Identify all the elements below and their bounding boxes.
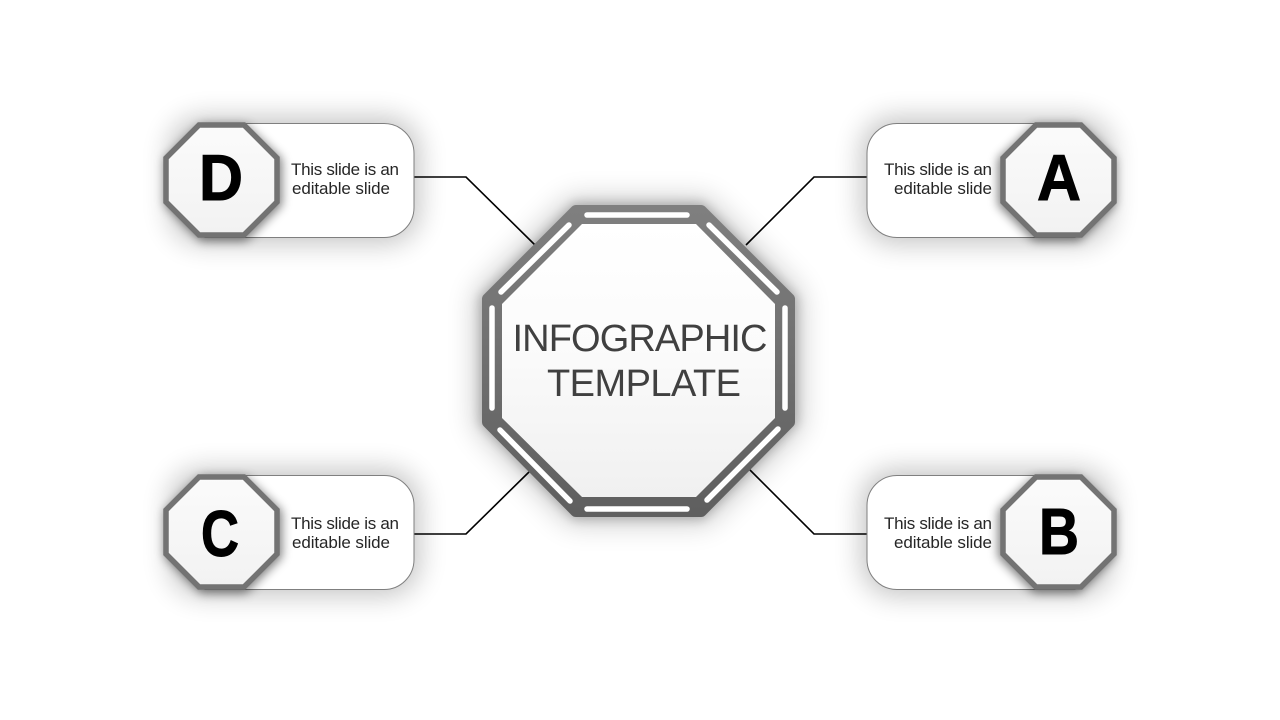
white slots [492, 215, 785, 509]
badge B [998, 477, 1115, 593]
card C [165, 470, 419, 595]
badge C [165, 477, 282, 593]
text D: This slide is an [291, 160, 399, 179]
text C [291, 514, 399, 552]
text A: This slide is an [884, 160, 992, 179]
octagon ring [488, 211, 789, 511]
text B [884, 514, 992, 552]
card A [862, 118, 1115, 243]
card B [862, 470, 1115, 595]
connector: A [746, 177, 867, 245]
central title [512, 318, 768, 405]
letter D: D [199, 141, 243, 214]
letter C: C [201, 497, 239, 570]
badge D [165, 125, 282, 241]
text A [884, 160, 992, 198]
text C: This slide is an [291, 514, 399, 533]
letter A: A [1037, 141, 1081, 214]
badge A [998, 125, 1115, 241]
text D [291, 160, 399, 198]
card D [165, 118, 419, 243]
text C: editable slide [292, 533, 390, 552]
connector: D [414, 177, 535, 245]
central title: INFOGRAPHIC [512, 318, 768, 360]
connector: B [750, 470, 867, 534]
central octagon [475, 198, 802, 524]
text A: editable slide [894, 179, 992, 198]
central title: TEMPLATE [547, 363, 741, 405]
letter B: B [1039, 495, 1079, 568]
text D: editable slide [292, 179, 390, 198]
connector: C [414, 472, 529, 534]
octagon face [502, 224, 775, 497]
text B: This slide is an [884, 514, 992, 533]
text B: editable slide [894, 533, 992, 552]
